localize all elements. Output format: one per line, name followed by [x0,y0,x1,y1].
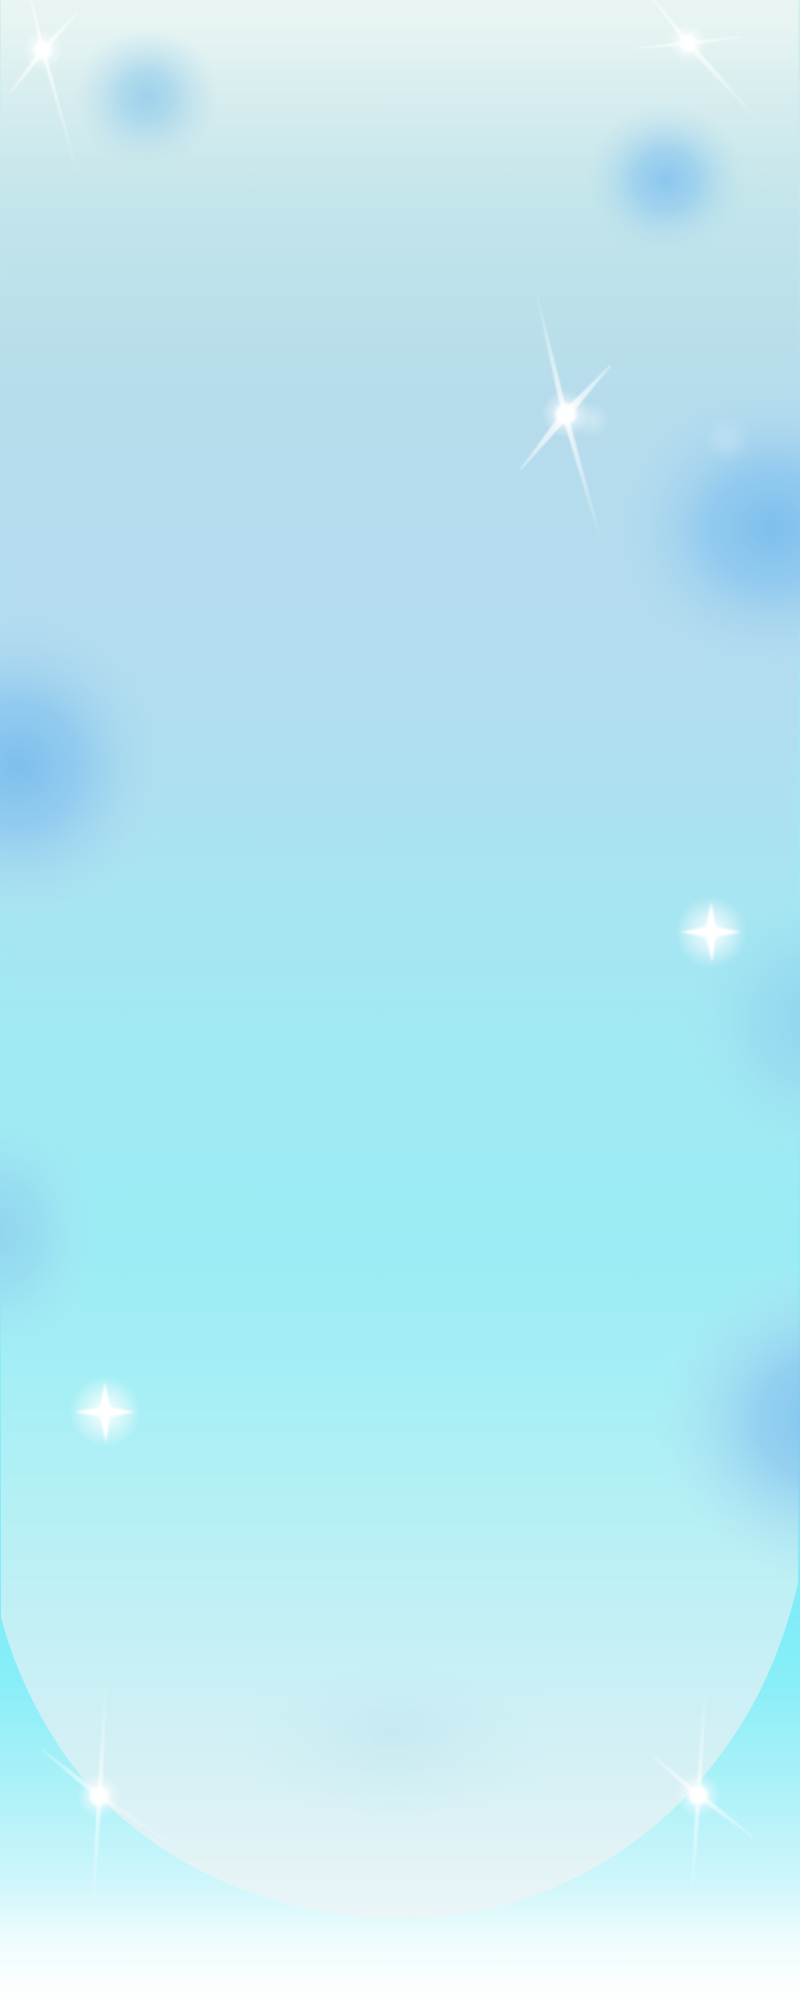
sparkle: centre right [520,295,611,545]
faint light spot near upper right [703,416,751,464]
blob: lower left edge [0,1107,100,1357]
sparkle: top right [635,0,760,122]
sparkle: bottom left [41,1683,169,1900]
blob: lower right edge [655,1260,800,1580]
blob: middle left edge [0,605,173,925]
blob: middle right edge [675,875,800,1165]
blob: upper right edge [607,380,800,676]
blob: top left [75,27,219,167]
sparkle: four-point star right [675,896,747,968]
sparkle: four-point star left [69,1376,141,1448]
blob: faint centre shadow [225,1640,565,1830]
sparkle: top left [10,0,78,172]
blob: top right [586,104,746,256]
sparkle: bottom right [653,1693,753,1890]
